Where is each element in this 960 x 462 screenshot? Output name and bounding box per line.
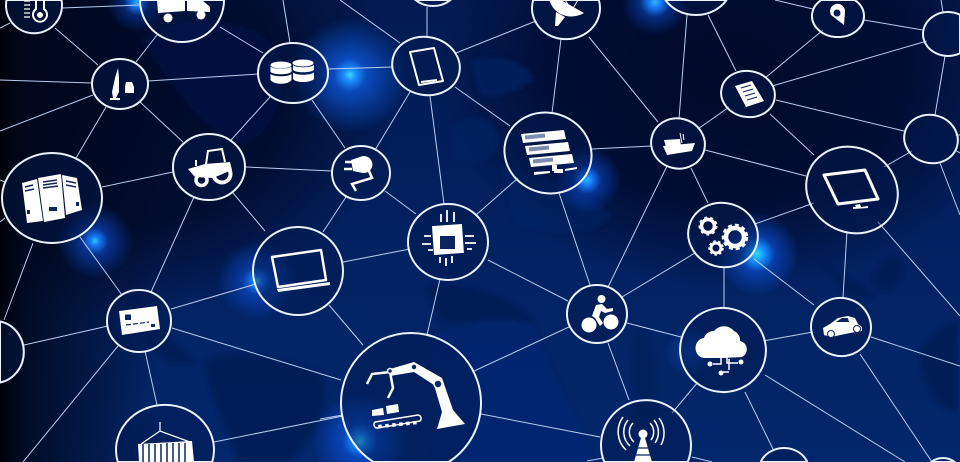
- node: satellite dish: [532, 0, 600, 39]
- node: cloud: [671, 298, 775, 402]
- node: right middle: [899, 109, 960, 169]
- node: truck: [140, 0, 224, 42]
- node: database: [258, 43, 328, 103]
- node: top right: [666, 0, 726, 15]
- node: bicycle: [567, 285, 627, 343]
- node: thermometer: [6, 0, 62, 33]
- node: syringe: [92, 59, 148, 109]
- node: ship: [645, 112, 711, 175]
- node: robot arm: [341, 333, 481, 462]
- node: bottom right: [931, 458, 955, 462]
- node: gears: [681, 195, 765, 275]
- node: right top: [923, 12, 960, 56]
- node: server cabinets: [2, 153, 102, 243]
- node: credit card: [107, 290, 171, 352]
- node: left edge: [0, 322, 24, 382]
- node: top small: [416, 0, 450, 6]
- node: server rack: [493, 100, 603, 206]
- node: car: [805, 291, 877, 363]
- node: laptop: [253, 227, 343, 315]
- node: plug: [332, 146, 390, 200]
- node: monitor: [790, 130, 914, 250]
- node: map pin: [812, 0, 864, 37]
- node: bottom: [761, 448, 807, 462]
- node: antenna tower: [601, 400, 691, 462]
- node: tractor: [173, 134, 245, 200]
- node: shipping container: [116, 405, 214, 462]
- node: microchip: [408, 204, 488, 280]
- node: document: [717, 67, 779, 121]
- node: tablet: [387, 31, 465, 101]
